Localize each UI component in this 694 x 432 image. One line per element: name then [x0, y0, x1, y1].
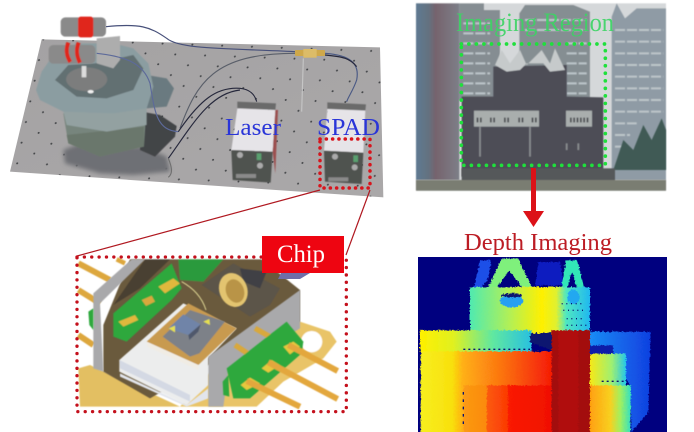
label: Laser: Laser [225, 114, 281, 141]
chart: depth map [418, 257, 667, 432]
ground [416, 168, 666, 191]
gold ring [214, 269, 252, 311]
right mid building [590, 354, 626, 387]
sky and buildings [416, 3, 666, 191]
white cooler stack [119, 303, 237, 407]
mount shadow [63, 143, 170, 175]
panel: city scene photo [416, 3, 666, 191]
lower block [463, 385, 552, 432]
distant towers [474, 260, 492, 287]
label: SPAD: SPAD [317, 114, 380, 141]
back housing [103, 259, 300, 398]
panel: chip close-up [77, 257, 346, 412]
dark foreground building [462, 48, 603, 177]
SPAD module [324, 102, 366, 184]
chip close-up frame [77, 257, 346, 412]
fibers [97, 25, 357, 177]
gold base and leads [78, 259, 337, 407]
callout: Chip [262, 236, 344, 279]
right green connector [223, 322, 338, 407]
mid building left [420, 330, 532, 352]
panel: optical table setup [10, 17, 383, 197]
arrow: photo to depth image [523, 168, 544, 227]
trees [613, 118, 666, 170]
tower [552, 330, 590, 432]
rotation stage [36, 36, 174, 157]
right wall [208, 290, 300, 407]
laser module [231, 102, 278, 183]
fiber coupler [295, 49, 325, 58]
right blue building [590, 331, 651, 432]
heading: Depth Imaging: Depth Imaging [464, 229, 612, 256]
lower fiber collimator [49, 43, 95, 64]
upper building [470, 287, 590, 334]
zoom connector lines [77, 190, 370, 256]
chip carrier [147, 282, 237, 370]
imaging region frame [461, 44, 605, 165]
dark mounting plate [140, 112, 177, 157]
SPAD highlight box [320, 139, 370, 188]
upper fiber collimator [61, 17, 106, 37]
optical breadboard [10, 39, 383, 197]
speckle noise [420, 304, 625, 429]
callout: Chip: Chip [277, 241, 325, 268]
left green connector [88, 263, 182, 342]
roof triangles [488, 259, 532, 287]
left wall [93, 259, 145, 372]
label: Imaging Region: Imaging Region [456, 8, 614, 37]
left lower building [421, 351, 552, 432]
